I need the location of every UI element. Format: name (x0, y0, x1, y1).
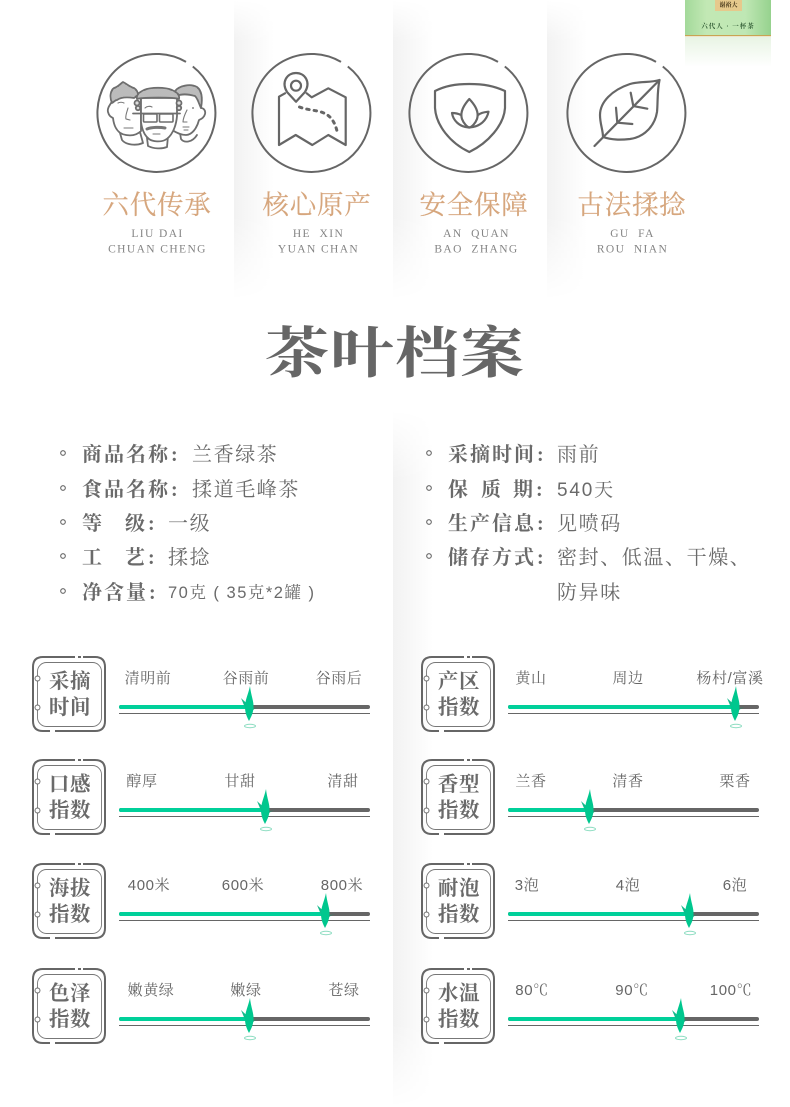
index: 产区指数: 产区 (438, 670, 480, 693)
feature: 古法揉捻 (567, 54, 687, 256)
index: 色泽指数: 指数 (49, 1008, 91, 1031)
index: 口感指数 (33, 760, 370, 834)
index: 采摘时间: 时间 (49, 696, 91, 719)
info row: 雨前 (557, 443, 600, 466)
info row (427, 546, 751, 569)
index: 产区指数: 黄山 (515, 669, 547, 687)
pinyin: ROU NIAN (597, 244, 668, 256)
index: 色泽指数: 苍绿 (328, 981, 360, 999)
index: 水温指数: 指数 (438, 1008, 480, 1031)
index: 口感指数: 指数 (49, 799, 91, 822)
index: 水温指数 (422, 969, 759, 1043)
index: 采摘时间: 谷雨后 (316, 670, 362, 687)
index: 色泽指数: 嫩黄绿 (128, 981, 174, 999)
info row: 质 (481, 478, 503, 501)
index: 耐泡指数: 4泡 (616, 877, 640, 894)
info row: 采摘时间: (448, 443, 546, 466)
info row: 密封、低温、干燥、 (557, 546, 751, 569)
heading: 古法揉捻 (577, 190, 687, 220)
index: 产区指数: 周边 (612, 670, 644, 687)
title: 茶叶档案 (265, 323, 525, 385)
info row (61, 443, 278, 466)
heading: 六代传承 (102, 190, 212, 220)
pinyin: HE XIN (293, 228, 344, 240)
index: 海拔指数: 海拔 (49, 877, 91, 900)
info row: 工 (82, 547, 104, 569)
info row: 食品名称: (82, 478, 180, 501)
index: 色泽指数 (33, 969, 370, 1043)
index: 香型指数 (422, 760, 759, 834)
index: 香型指数: 指数 (438, 799, 480, 822)
index: 水温指数: 水温 (438, 982, 480, 1005)
feature: 核心原产 (252, 54, 372, 256)
info row (427, 443, 600, 466)
index: 产区指数: 杨村/富溪 (696, 669, 764, 687)
index: 产区指数: 指数 (438, 696, 480, 719)
index: 采摘时间: 清明前 (125, 670, 171, 687)
pinyin: GU FA (610, 228, 655, 240)
info row: 期: (513, 478, 545, 501)
index: 香型指数: 栗香 (719, 773, 751, 790)
info row: 商品名称: (82, 443, 180, 466)
index: 口感指数: 甘甜 (224, 773, 256, 790)
pinyin (597, 228, 668, 256)
product info: left column (61, 443, 316, 604)
index: 口感指数: 清甜 (327, 773, 359, 790)
feature: 六代传承 (97, 54, 215, 256)
index: 采摘时间: 谷雨前 (223, 670, 269, 687)
index: 海拔指数: 指数 (49, 903, 91, 926)
info row: 揉道毛峰茶 (192, 478, 300, 501)
info row (427, 512, 622, 535)
info row: 兰香绿茶 (192, 443, 278, 466)
info row: 一级 (168, 512, 211, 535)
info row: 生产信息: (448, 512, 546, 535)
product info: right column (427, 443, 751, 604)
product tin (685, 0, 771, 67)
icon: shield with leaf sprout (409, 54, 527, 172)
index: 耐泡指数: 耐泡 (438, 877, 480, 900)
icon: leaf (567, 54, 685, 172)
pinyin: AN QUAN (443, 228, 510, 240)
info row (427, 478, 615, 501)
icon: map with pin (252, 54, 370, 172)
background shading: lower column (393, 456, 408, 1052)
info row (61, 581, 316, 604)
info row: 保 (448, 478, 470, 501)
index: 口感指数: 口感 (49, 772, 92, 796)
index: 色泽指数: 嫩绿 (230, 981, 262, 999)
info row: 70克 ( 35克*2罐 ) (168, 583, 316, 602)
info row (61, 478, 300, 501)
pinyin: YUAN CHAN (278, 244, 359, 256)
index: 产区指数 (422, 657, 764, 731)
background shading: upper columns (234, 28, 562, 245)
index: 采摘时间: 采摘 (49, 670, 91, 693)
index: 耐泡指数: 6泡 (723, 877, 747, 894)
index: 采摘时间 (33, 657, 370, 731)
pinyin (108, 228, 207, 256)
icon: three generations of faces (97, 54, 215, 172)
product tin: 六代人 · 一杯茶 (701, 21, 755, 30)
index: 香型指数: 兰香 (515, 773, 547, 790)
index: 海拔指数: 600米 (222, 877, 264, 894)
heading: 核心原产 (262, 190, 372, 220)
index: 耐泡指数: 3泡 (515, 877, 539, 894)
pinyin (434, 228, 519, 256)
info row: 见喷码 (557, 512, 622, 535)
index: 海拔指数: 400米 (128, 877, 170, 894)
info row: 净含量: (82, 581, 158, 604)
product tin: 谢裕大 (719, 1, 738, 9)
feature: 安全保障 (409, 54, 529, 255)
index: 水温指数: 100℃ (710, 982, 752, 999)
pinyin: LIU DAI (131, 228, 184, 240)
index: 色泽指数: 色泽 (49, 982, 91, 1005)
info row (61, 512, 211, 535)
index: 水温指数: 90℃ (615, 982, 649, 999)
info row: 等 (82, 512, 104, 535)
index: 耐泡指数: 指数 (438, 903, 480, 926)
info row (61, 546, 211, 569)
index: 耐泡指数 (422, 864, 759, 938)
index: 香型指数: 香型 (438, 773, 480, 796)
info row: 级: (125, 512, 157, 535)
pinyin: BAO ZHANG (434, 244, 519, 256)
pinyin: CHUAN CHENG (108, 244, 207, 256)
heading: 安全保障 (419, 190, 529, 220)
info row continuation: 防异味 (557, 581, 622, 604)
info row: 储存方式: (448, 546, 546, 569)
info row: 540天 (557, 480, 615, 501)
index: 海拔指数 (33, 864, 370, 938)
index: 香型指数: 清香 (612, 773, 644, 790)
index: 口感指数: 醇厚 (126, 773, 158, 790)
index: 海拔指数: 800米 (321, 877, 363, 894)
index: 水温指数: 80℃ (515, 982, 549, 999)
info row: 揉捻 (168, 546, 211, 569)
pinyin (278, 228, 359, 256)
info row: 艺: (125, 546, 157, 569)
